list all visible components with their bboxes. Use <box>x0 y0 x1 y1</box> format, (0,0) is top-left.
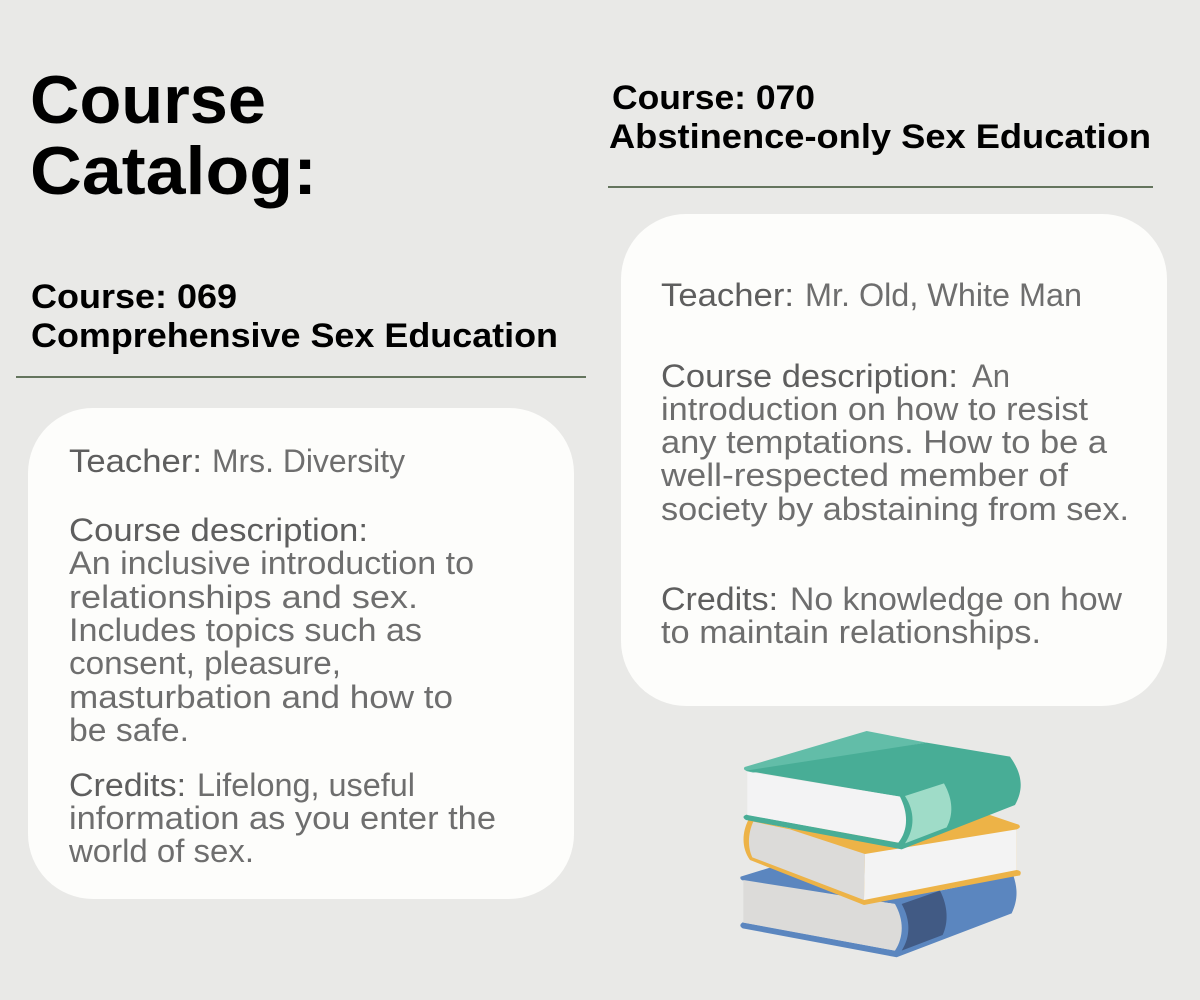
yellow book <box>744 815 1021 905</box>
credits 069: Lifelong, useful <box>197 767 415 803</box>
course description 070: any temptations. How to be a <box>661 424 1107 460</box>
course description 069: masturbation and how to <box>69 679 453 715</box>
credits 069: world of sex. <box>68 833 254 869</box>
credits 070 <box>661 581 1123 650</box>
title: Course <box>30 62 266 138</box>
credits 069: Credits: <box>69 767 186 803</box>
icon: stack of books <box>740 731 1021 957</box>
course description 070: society by abstaining from sex. <box>661 491 1129 527</box>
course description 069: An inclusive introduction to <box>69 545 474 581</box>
green book <box>743 731 1021 849</box>
credits 069 <box>68 767 496 869</box>
course description 070: introduction on how to resist <box>661 391 1088 427</box>
course description 070: Course description: <box>661 358 958 394</box>
course description 069 <box>69 512 474 748</box>
teacher 069 <box>69 443 405 479</box>
credits 070: No knowledge on how <box>790 581 1123 617</box>
course description 070 <box>660 358 1129 527</box>
heading: course 070: Course: 070 <box>612 79 815 117</box>
credits 070: to maintain relationships. <box>661 614 1041 650</box>
title: Catalog: <box>30 133 317 209</box>
panel: course 070 details <box>621 214 1167 706</box>
heading: course 070: Abstinence-only Sex Education <box>609 118 1151 156</box>
course description 069: relationships and sex. <box>69 579 418 615</box>
course description 069: be safe. <box>69 712 189 748</box>
heading: course 069: Comprehensive Sex Education <box>31 317 558 355</box>
teacher 070: Mr. Old, White Man <box>805 277 1082 313</box>
heading: course 070 <box>609 79 1151 156</box>
credits 070: Credits: <box>661 581 778 617</box>
course description 069: Course description: <box>69 512 368 548</box>
teacher 070 <box>661 277 1082 313</box>
credits 069: information as you enter the <box>69 800 496 836</box>
course description 069: Includes topics such as <box>69 612 422 648</box>
course description 070: An <box>972 358 1010 394</box>
heading: course 069 <box>31 278 558 355</box>
teacher 070: Teacher: <box>661 277 794 313</box>
heading: course 069: Course: 069 <box>31 278 237 316</box>
blue book <box>740 868 1017 957</box>
teacher 069: Mrs. Diversity <box>212 443 405 479</box>
course description 069: consent, pleasure, <box>69 645 341 681</box>
title <box>30 62 317 209</box>
teacher 069: Teacher: <box>69 443 202 479</box>
panel: course 069 details <box>28 408 574 899</box>
course description 070: well-respected member of <box>660 457 1068 493</box>
